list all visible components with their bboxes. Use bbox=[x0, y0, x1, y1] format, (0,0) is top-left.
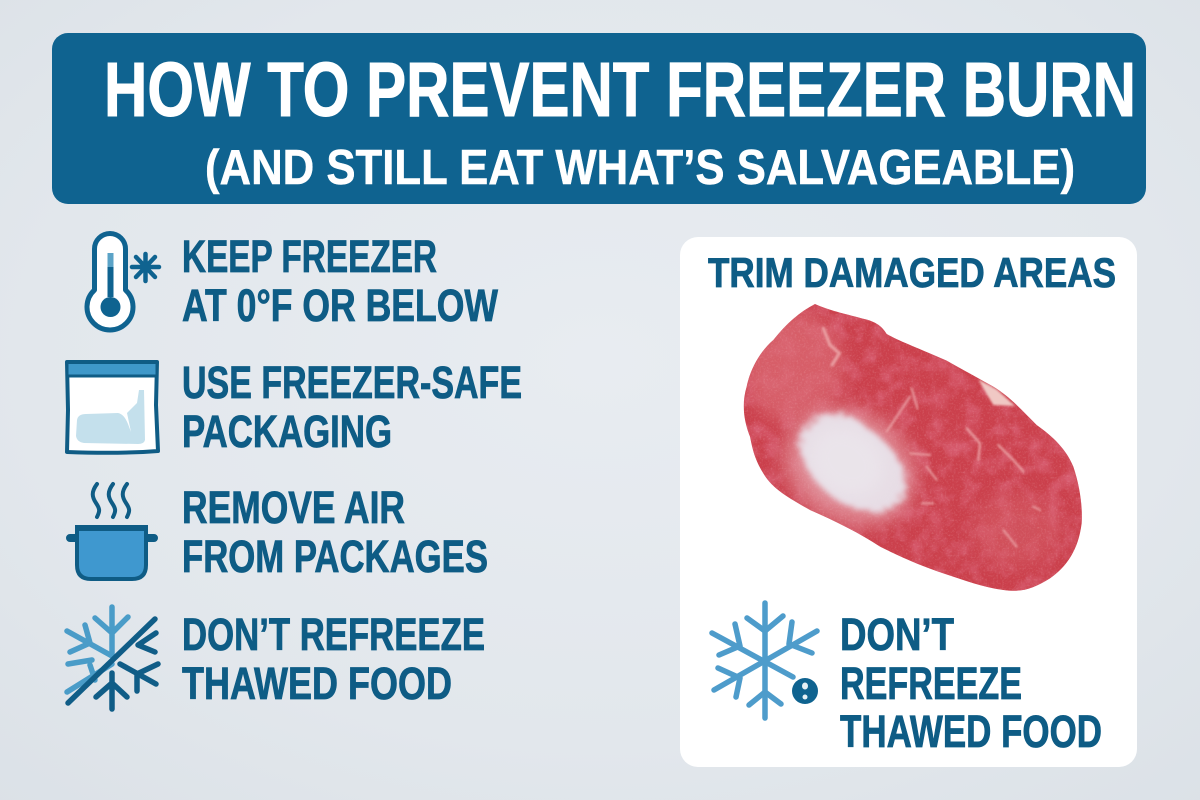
panel note text: DON’T bbox=[840, 609, 954, 660]
icon: steaming pot bbox=[70, 484, 154, 579]
subtitle: (AND STILL EAT WHAT’S SALVAGEABLE) bbox=[205, 141, 1075, 195]
tip text: DON’T REFREEZE bbox=[182, 609, 485, 660]
tip text: KEEP FREEZER bbox=[182, 231, 437, 282]
panel heading: TRIM DAMAGED AREAS bbox=[708, 249, 1116, 296]
panel: trim damaged areas bbox=[680, 237, 1137, 767]
tip text: REMOVE AIR bbox=[182, 482, 405, 533]
tip: remove air bbox=[70, 482, 488, 582]
tip text: FROM PACKAGES bbox=[182, 531, 488, 582]
icon: freezer bag bbox=[67, 362, 158, 453]
tip text: USE FREEZER-SAFE bbox=[182, 357, 522, 408]
tip text: PACKAGING bbox=[182, 406, 392, 457]
tip: freezer-safe packaging bbox=[67, 357, 522, 457]
tip: do not refreeze bbox=[67, 607, 485, 709]
title banner bbox=[52, 33, 1146, 204]
icon: snowflake with alert badge bbox=[712, 603, 818, 718]
tip text: AT 0°F OR BELOW bbox=[182, 280, 498, 331]
tip text bbox=[182, 231, 498, 331]
tip: keep freezer cold bbox=[87, 231, 498, 331]
tip text: THAWED FOOD bbox=[182, 658, 452, 709]
icon: crossed-out snowflake bbox=[67, 607, 158, 709]
panel note text: REFREEZE bbox=[840, 658, 1022, 709]
tip text bbox=[182, 482, 488, 582]
panel note text bbox=[840, 609, 1102, 757]
panel note text: THAWED FOOD bbox=[840, 706, 1102, 757]
tip text bbox=[182, 357, 522, 457]
frost patch bbox=[795, 411, 907, 513]
icon: thermometer with snow asterisk bbox=[87, 234, 159, 330]
tip text bbox=[182, 609, 485, 709]
image: meat with freezer burn patch bbox=[744, 304, 1082, 591]
